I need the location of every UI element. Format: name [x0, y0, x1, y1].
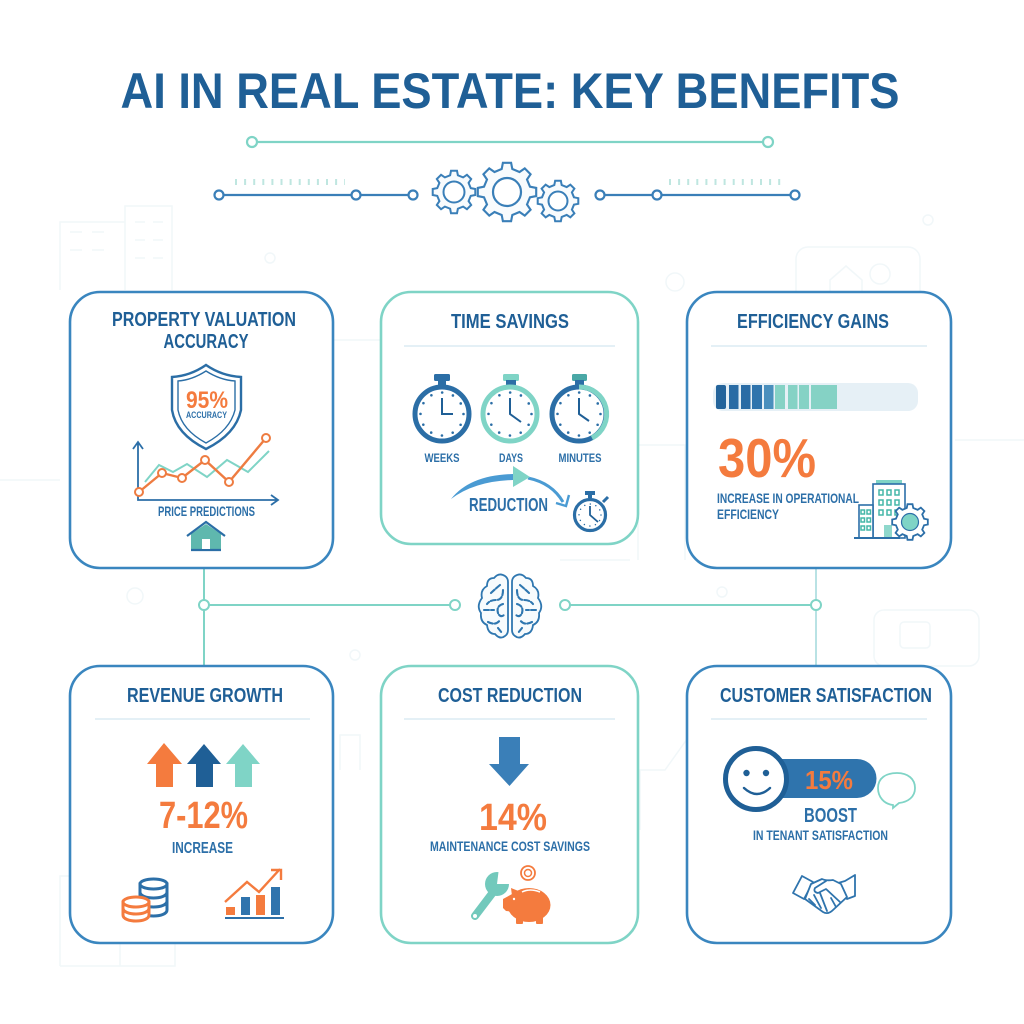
stat: 30%: 30% [718, 427, 816, 489]
title: AI IN REAL ESTATE: KEY BENEFITS [120, 63, 900, 119]
labels: weeks days minutes [424, 451, 602, 465]
panel: property valuation accuracy: ACCURACY [186, 410, 227, 420]
icon: house [187, 522, 225, 550]
pill with 15% [770, 759, 876, 798]
panel: revenue growth [70, 666, 333, 943]
icon: piggy bank [503, 866, 550, 924]
icon: stopwatch weeks [415, 374, 469, 441]
text: increase in operational efficiency: INCREASE IN OPERATIONAL [717, 490, 859, 506]
panel: customer satisfaction [687, 666, 951, 943]
heading: efficiency gains: EFFICIENCY GAINS [737, 311, 889, 333]
heading: property valuation accuracy: PROPERTY VALUATION [112, 309, 296, 331]
icon: brain [479, 574, 541, 638]
icon: speech bubble [878, 773, 915, 808]
heading: customer satisfaction: CUSTOMER SATISFACTION [720, 685, 932, 707]
heading: time savings: TIME SAVINGS [451, 311, 569, 333]
header divider: teal line [247, 137, 773, 147]
label: increase: INCREASE [172, 840, 233, 857]
pill with 15%: 15% [805, 765, 853, 795]
icon: coin stacks [123, 879, 167, 921]
icon: growth bar chart [225, 869, 284, 918]
header decoration: right circuit line [596, 182, 800, 200]
heading: revenue growth: REVENUE GROWTH [127, 685, 283, 707]
connector lines and nodes [199, 568, 821, 666]
label: price predictions: PRICE PREDICTIONS [158, 503, 255, 519]
panel: efficiency gains [687, 292, 951, 568]
panel: property valuation accuracy [70, 292, 333, 568]
icon: buildings and gear [854, 480, 928, 540]
labels: weeks days minutes: DAYS [499, 451, 523, 465]
icon: stopwatch minutes [552, 374, 607, 441]
panel: property valuation accuracy: ACCURACY [164, 331, 249, 353]
icon: handshake [793, 875, 855, 913]
stat: 95% accuracy: 95% [186, 387, 228, 414]
panel: cost reduction [381, 666, 638, 943]
panel: time savings [381, 292, 638, 544]
icon: small stopwatch [574, 491, 608, 530]
icon: shield [172, 365, 241, 449]
panel: efficiency gains: EFFICIENCY [717, 506, 779, 522]
label: boost: BOOST [804, 805, 857, 827]
icons: three up arrows [147, 743, 260, 787]
arrow: reduction curve [451, 466, 569, 506]
chart: price predictions line chart [133, 434, 278, 505]
stat: 14%: 14% [479, 797, 547, 839]
labels: weeks days minutes: MINUTES [558, 451, 602, 465]
icon: wrench [473, 868, 510, 918]
text: in tenant satisfaction: IN TENANT SATISFACTION [753, 827, 888, 843]
icon: down arrow [489, 737, 529, 786]
labels: weeks days minutes: WEEKS [424, 451, 460, 465]
icon: three gears [433, 163, 578, 221]
icon: smiley face [726, 748, 786, 810]
icon: stopwatch days [483, 374, 537, 441]
progress bar [713, 383, 918, 411]
stat: 7-12%: 7-12% [159, 795, 248, 837]
text: maintenance cost savings: MAINTENANCE COST SAVINGS [430, 838, 590, 854]
label: reduction: REDUCTION [469, 495, 548, 515]
header decoration: left circuit line [214, 182, 418, 200]
heading: cost reduction: COST REDUCTION [438, 685, 582, 707]
